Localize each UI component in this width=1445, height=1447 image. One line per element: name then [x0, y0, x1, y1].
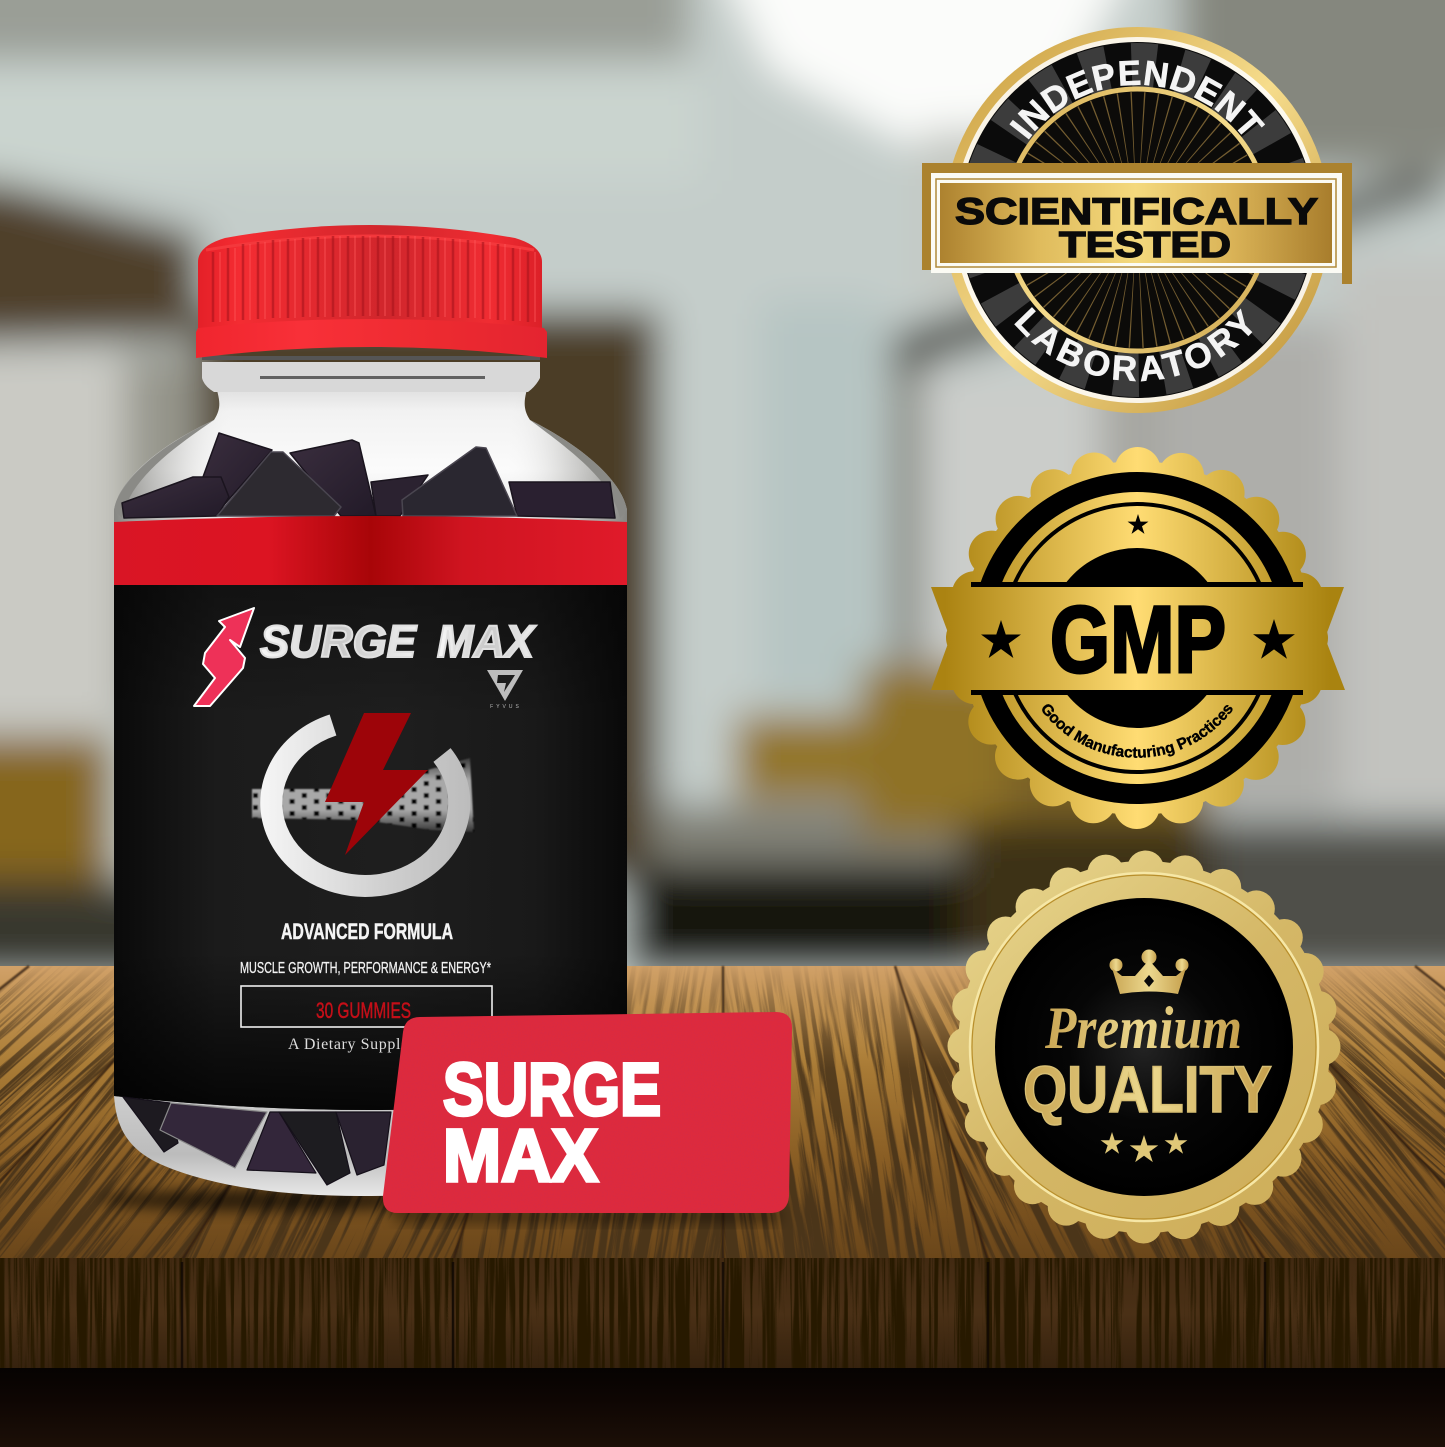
scalloped gold seal — [960, 461, 1314, 815]
icon: left star — [981, 620, 1021, 658]
card text: MAX: MAX — [443, 1114, 598, 1197]
ribbon banner — [931, 582, 1345, 695]
label logo: SURGE MAX: SURGE — [260, 616, 418, 667]
gummies count box: 30 GUMMIES — [316, 998, 411, 1023]
GMP heading: GMP — [1050, 587, 1226, 693]
red cap — [196, 225, 547, 358]
supplement bottle — [114, 225, 627, 1196]
table front edge — [0, 1258, 1445, 1369]
icon: power ring with bolt — [252, 713, 474, 886]
wooden table — [0, 966, 1445, 1447]
label logo: SURGE MAX: MAX — [437, 616, 537, 667]
gummies count box — [241, 986, 492, 1027]
gummies bottom — [123, 1097, 391, 1185]
table top planks — [0, 966, 1445, 1260]
ribbon text: SCIENTIFICALLY: SCIENTIFICALLY — [955, 191, 1318, 232]
icon: top star — [1128, 514, 1148, 534]
label logo: arrow S — [194, 608, 254, 706]
label text: advanced formula: ADVANCED FORMULA — [281, 919, 453, 944]
card text: SURGE: SURGE — [443, 1048, 661, 1131]
curved text: Good Manufacturing Practices — [1042, 704, 1233, 758]
card shadow — [395, 1210, 780, 1222]
label text: benefits: MUSCLE GROWTH, PERFORMANCE & ENERGY* — [240, 960, 491, 977]
heading: Premium: Premium — [1044, 995, 1242, 1061]
red label band — [114, 516, 627, 586]
bottle shadow — [100, 1189, 440, 1211]
blurred room background — [0, 0, 1445, 1100]
gummies top — [122, 433, 615, 518]
brand mark: FYVUS: FYVUS — [490, 704, 522, 710]
badge: GMP — [931, 447, 1345, 829]
table underside shadow — [0, 1368, 1445, 1447]
ring text: LABORATORY: LABORATORY — [1014, 307, 1252, 382]
glass jar — [114, 356, 627, 1196]
scalloped seal — [958, 861, 1330, 1233]
brand mark: FYVUS — [487, 670, 523, 710]
icon: right star — [1253, 619, 1295, 659]
icon: three stars — [1101, 1132, 1187, 1162]
ribbon text: TESTED: TESTED — [1059, 224, 1231, 265]
ring text: INDEPENDENT: INDEPENDENT — [1009, 60, 1266, 140]
red card — [383, 1012, 792, 1213]
badge: independent laboratory — [922, 27, 1352, 413]
badge: premium quality — [958, 861, 1330, 1233]
black label — [114, 585, 627, 1110]
cap collar — [196, 319, 547, 358]
label text: dietary supplement: A Dietary Supplement — [288, 1036, 443, 1053]
ribbon — [922, 163, 1352, 284]
heading: QUALITY: QUALITY — [1023, 1052, 1272, 1126]
icon: crown — [1110, 950, 1188, 994]
label logo: SURGE MAX — [260, 616, 537, 667]
